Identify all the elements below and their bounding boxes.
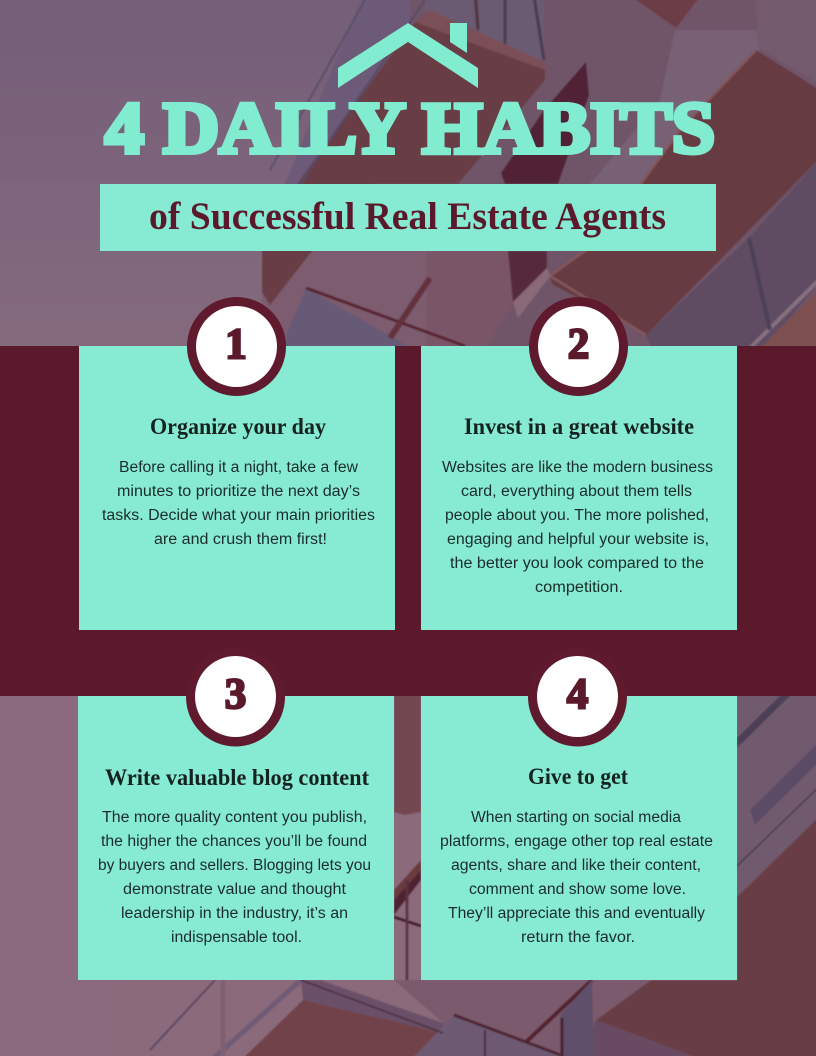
subtitle banner (100, 184, 716, 251)
text block: habit 4 description: return the favor. (521, 929, 635, 946)
text block: habit 3 description: by buyers and sellers. Blogging lets you (98, 857, 371, 874)
text block: habit 4 description: They’ll appreciate this and eventually (448, 905, 705, 922)
text block: habit 2 description: the better you look compared to the (450, 555, 704, 572)
badge: number 3: 3 (225, 671, 246, 718)
text block: habit 3 description: indispensable tool. (171, 929, 302, 946)
text block: habit 2 description: engaging and helpful your website is, (447, 531, 709, 548)
text block: habit 3 description: leadership in the industry, it’s an (121, 905, 348, 922)
text block: habit 4 description: platforms, engage other top real estate (440, 833, 713, 850)
text block: habit 3 description: demonstrate value and thought (123, 881, 347, 898)
text block: habit 4 description: comment and show some love. (469, 881, 686, 898)
icon: house roof (338, 23, 478, 88)
subtitle banner: of Successful Real Estate Agents (149, 195, 666, 238)
badge: number 1: 1 (225, 321, 247, 368)
text block: habit 1 description: Before calling it a night, take a few (119, 459, 359, 476)
badge: number 2 (529, 297, 628, 396)
panel: habit 1 (79, 297, 395, 630)
text block: habit 1 description (102, 459, 375, 548)
panel: habit 3 (78, 648, 394, 980)
text block: habit 2 description: Websites are like the modern business (442, 459, 713, 476)
text block: habit 4 description: When starting on social media (471, 809, 681, 826)
text block: habit 3 description: The more quality content you publish, (102, 809, 367, 826)
text block: habit 1 description: are and crush them first! (154, 531, 327, 548)
text block: habit 1 description: minutes to prioritize the next day’s (117, 483, 360, 500)
panel: habit 2 (421, 297, 737, 630)
badge: number 4 (528, 648, 627, 746)
heading: organize your day: Organize your day (150, 414, 326, 439)
text block: habit 4 description (440, 809, 713, 946)
title: 4 DAILY HABITS (105, 88, 715, 168)
heading: invest in a great website: Invest in a great website (464, 414, 694, 439)
text block: habit 2 description: card, everything about them tells (461, 483, 692, 500)
badge: number 3 (186, 648, 285, 746)
text block: habit 3 description: the higher the chances you’ll be found (101, 833, 367, 850)
text block: habit 2 description: competition. (535, 579, 623, 596)
text block: habit 1 description: tasks. Decide what your main priorities (102, 507, 375, 524)
text block: habit 2 description (442, 459, 713, 596)
text block: habit 4 description: agents, share and like their content, (451, 857, 701, 874)
panel: habit 4 (421, 648, 737, 980)
text block: habit 2 description: people about you. The more polished, (445, 507, 709, 524)
heading: give to get: Give to get (528, 764, 628, 789)
badge: number 1 (187, 297, 286, 396)
dark maroon band (0, 346, 816, 696)
badge: number 4: 4 (567, 671, 588, 718)
text block: habit 3 description (98, 809, 371, 946)
badge: number 2: 2 (568, 321, 589, 368)
heading: write valuable blog content: Write valuable blog content (105, 765, 369, 790)
